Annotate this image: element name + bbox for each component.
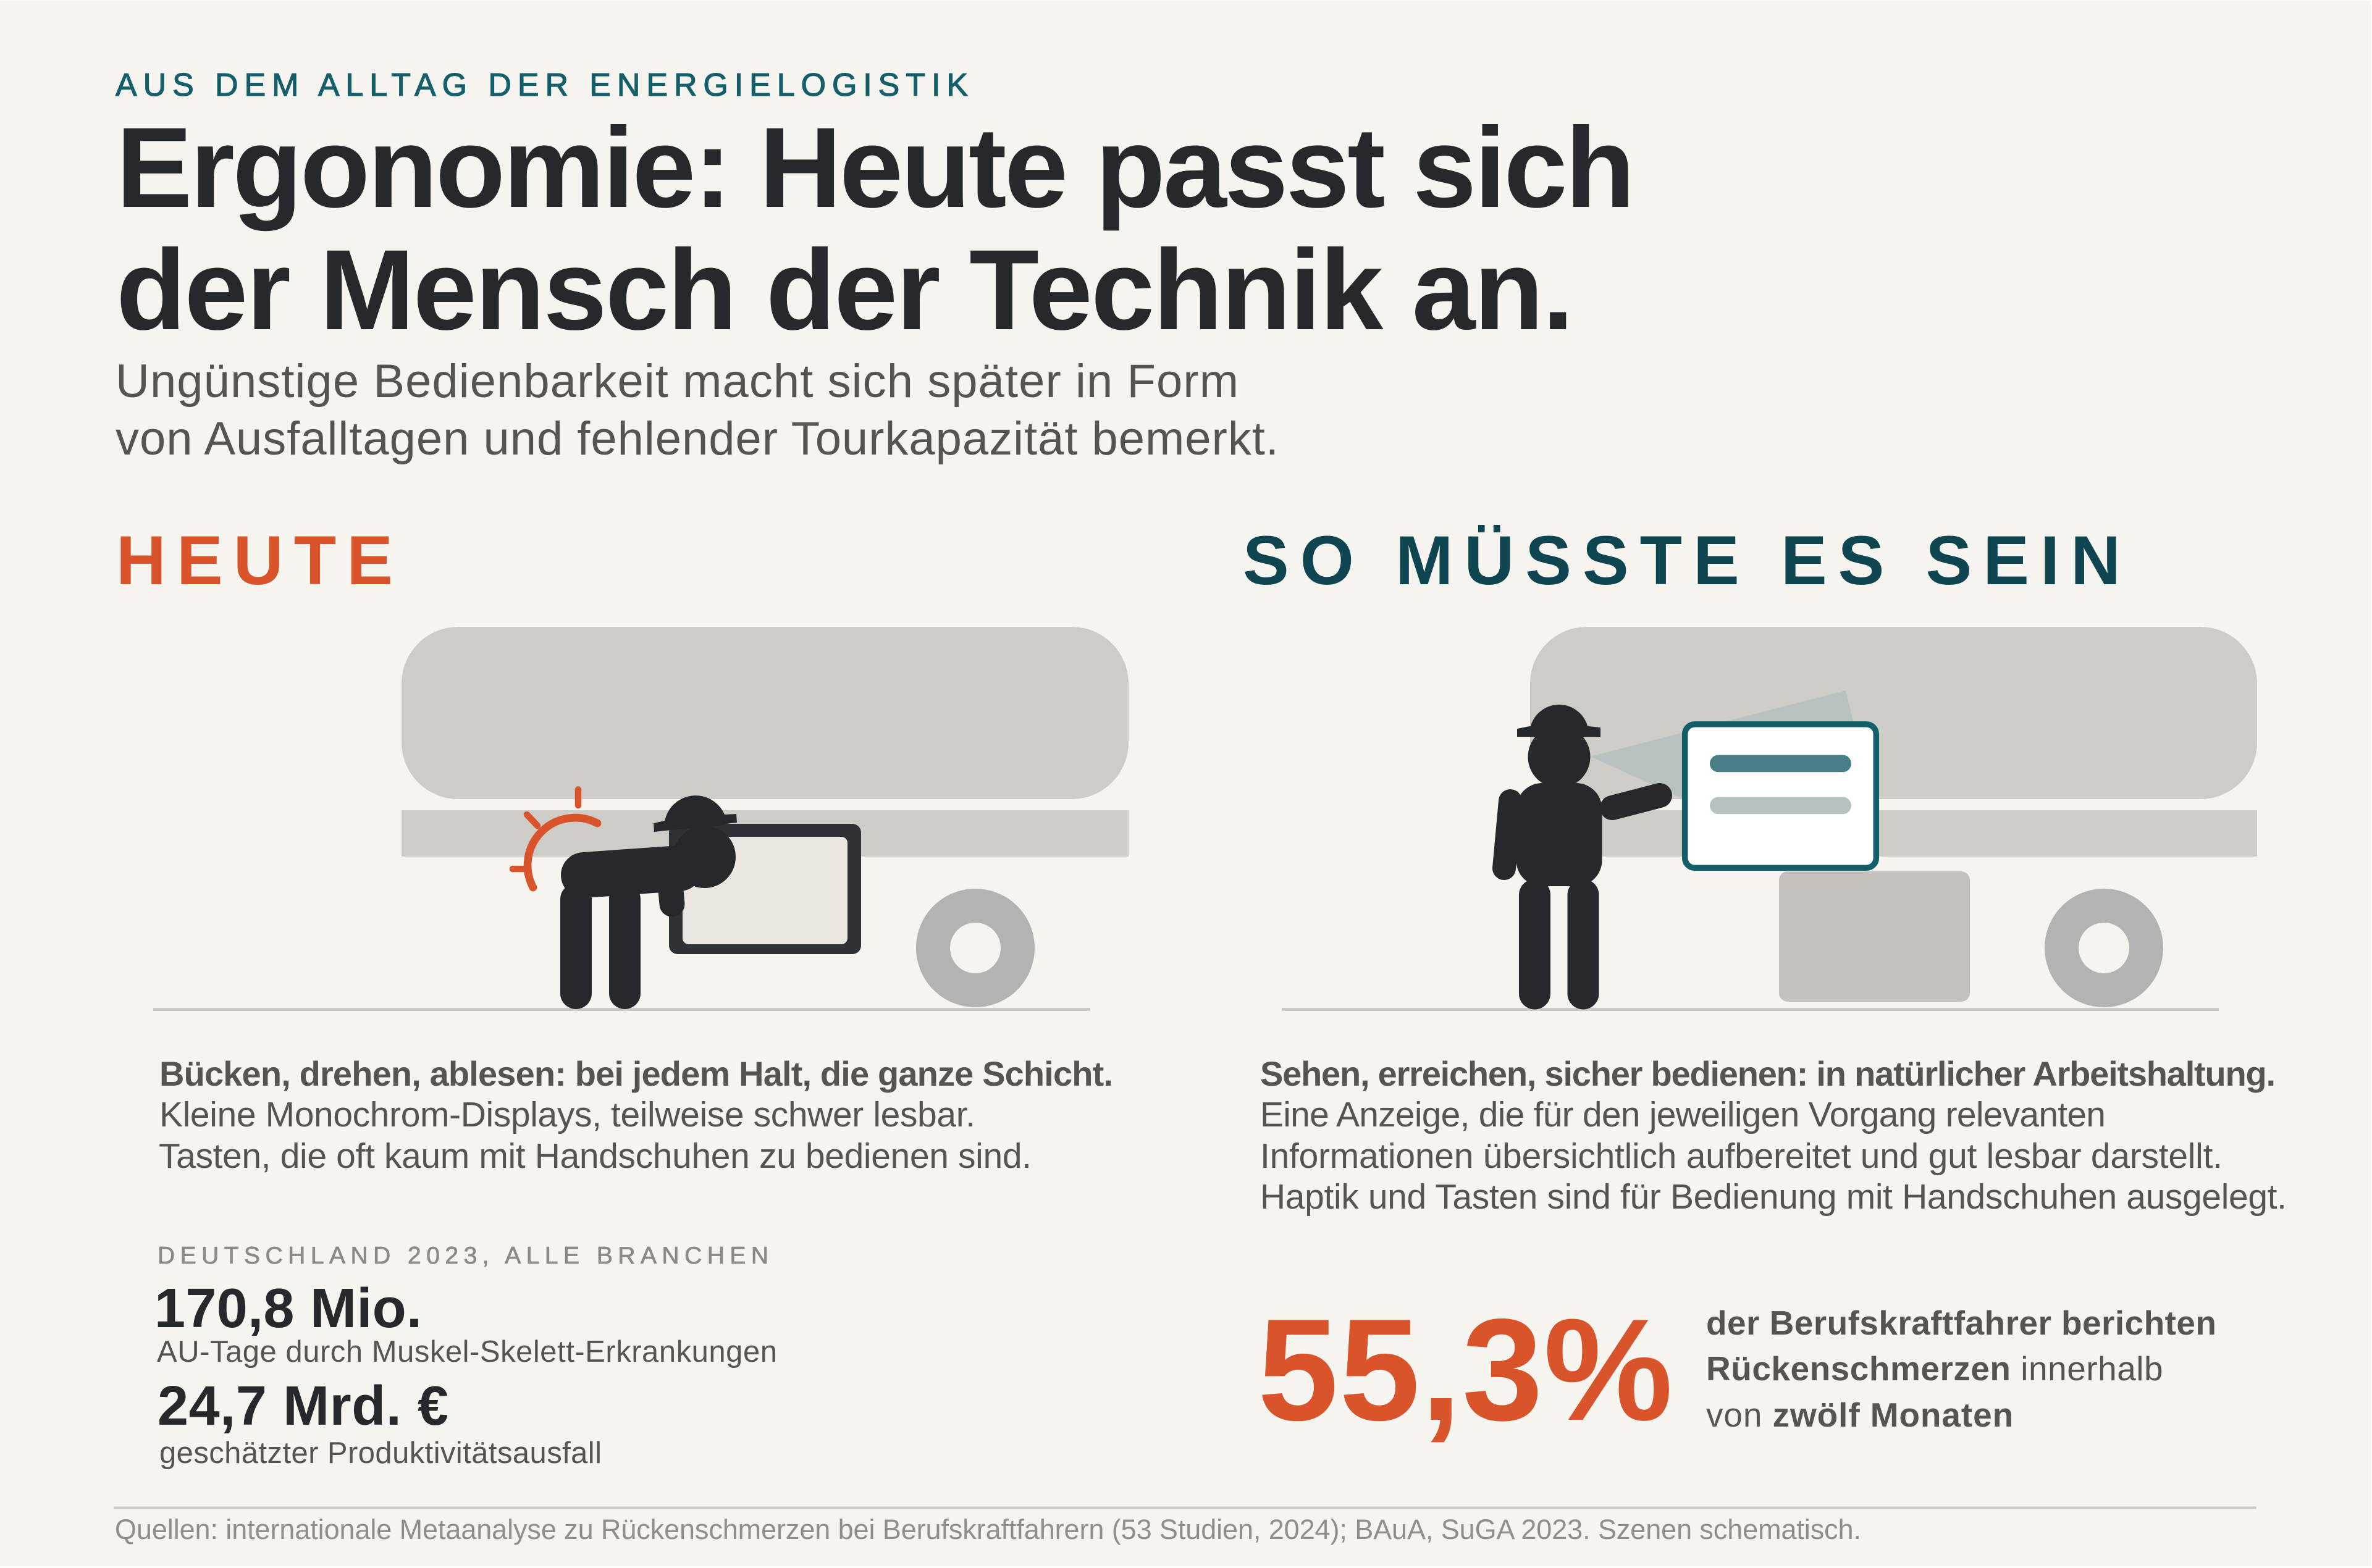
wheel bbox=[2062, 905, 2146, 991]
title bbox=[116, 104, 1635, 354]
text block: ideal bbox=[1260, 1054, 2287, 1217]
pain marker bbox=[513, 789, 597, 887]
stat: 24,7 Mrd. €: 24,7 Mrd. € bbox=[158, 1375, 448, 1437]
text block: ideal: Sehen, erreichen, sicher bedienen: in natürlicher Arbeitshaltung. bbox=[1260, 1054, 2276, 1093]
heading: SO MÜSSTE ES SEIN: SO MÜSSTE ES SEIN bbox=[1243, 522, 2121, 599]
low display bbox=[669, 824, 861, 954]
raised display bbox=[1685, 724, 1876, 868]
big stat description: der Berufskraftfahrer berichten bbox=[1706, 1304, 2216, 1342]
stat: 170,8 Mio.: 170,8 Mio. bbox=[154, 1278, 422, 1340]
big stat: 55,3%: 55,3% bbox=[1258, 1288, 1673, 1451]
subtitle: Ungünstige Bedienbarkeit macht sich später in Form bbox=[116, 355, 1239, 408]
title: Ergonomie: Heute passt sich bbox=[116, 104, 1635, 232]
stat: 170,8 Mio.: AU-Tage durch Muskel-Skelett-Erkrankungen bbox=[157, 1335, 777, 1369]
text block: today: Bücken, drehen, ablesen: bei jedem Halt, die ganze Schicht. bbox=[159, 1054, 1113, 1093]
text block: today bbox=[159, 1054, 1113, 1176]
text block: today: Tasten, die oft kaum mit Handschuhen zu bedienen sind. bbox=[159, 1136, 1032, 1176]
chassis bbox=[1530, 810, 2257, 857]
scene: ideal, upright worker at raised display bbox=[1282, 627, 2257, 1011]
chassis bbox=[402, 810, 1129, 857]
upright worker figure bbox=[1504, 705, 1660, 994]
text block: ideal: Eine Anzeige, die für den jeweiligen Vorgang relevanten bbox=[1260, 1095, 2106, 1134]
stats label: DEUTSCHLAND 2023, ALLE BRANCHEN bbox=[158, 1243, 768, 1269]
big stat description bbox=[1706, 1304, 2216, 1434]
eyebrow: AUS DEM ALLTAG DER ENERGIELOGISTIK bbox=[116, 67, 968, 103]
subtitle: von Ausfalltagen und fehlender Tourkapazität bemerkt. bbox=[116, 413, 1279, 465]
sources: Quellen: internationale Metaanalyse zu Rückenschmerzen bei Berufskraftfahrern (53 Studien, 2024); BAuA, SuGA 2023. Szenen schematisch. bbox=[115, 1514, 1861, 1545]
title: der Mensch der Technik an. bbox=[116, 227, 1574, 354]
scene: today, bent worker at low display bbox=[153, 627, 1129, 1011]
text block: today: Kleine Monochrom-Displays, teilweise schwer lesbar. bbox=[159, 1095, 975, 1134]
text block: ideal: Haptik und Tasten sind für Bedienung mit Handschuhen ausgelegt. bbox=[1260, 1177, 2287, 1217]
subtitle bbox=[116, 355, 1279, 465]
text block: ideal: Informationen übersichtlich aufbereitet und gut lesbar darstellt. bbox=[1260, 1136, 2223, 1176]
sight cone bbox=[1591, 690, 1862, 815]
ground line bbox=[153, 1008, 1090, 1011]
ground line bbox=[1282, 1008, 2219, 1011]
big stat description: von zwölf Monaten bbox=[1706, 1396, 2014, 1434]
stat: 24,7 Mrd. € bbox=[158, 1375, 602, 1470]
stat: 24,7 Mrd. €: geschätzter Produktivitätsausfall bbox=[159, 1436, 602, 1470]
stat: 170,8 Mio. bbox=[154, 1278, 777, 1369]
bent worker figure bbox=[576, 795, 737, 993]
heading: HEUTE: HEUTE bbox=[116, 522, 393, 599]
big stat description: Rückenschmerzen innerhalb bbox=[1706, 1349, 2163, 1388]
tank body bbox=[402, 627, 1129, 799]
footer rule bbox=[114, 1507, 2256, 1509]
wheel bbox=[933, 905, 1018, 991]
box under display bbox=[1779, 871, 1970, 1002]
tank body bbox=[1530, 627, 2257, 799]
